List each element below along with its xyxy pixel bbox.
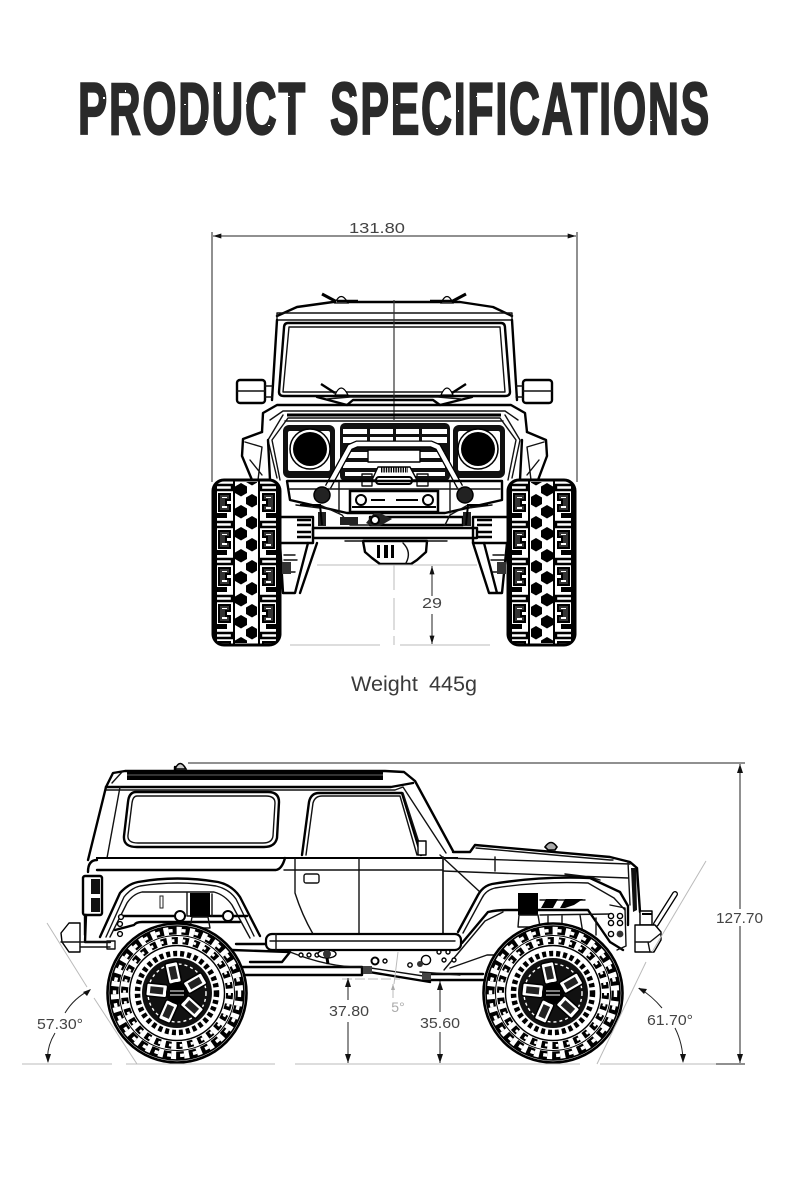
middle clearance dimension: 37.80 xyxy=(329,978,400,1063)
front approach angle: 61.70 degrees: 61.70° xyxy=(647,1012,693,1029)
front view: axle, differential and suspension xyxy=(280,505,508,593)
front view: grille xyxy=(340,423,450,481)
side view: hood and front fender xyxy=(418,841,640,950)
breakover angle: 5 degrees xyxy=(391,952,405,1015)
front view: left tire xyxy=(213,480,280,645)
side view: front wheel xyxy=(484,924,622,1062)
front view: side mirrors xyxy=(237,380,552,403)
rear departure angle: 57.30 degrees xyxy=(37,923,137,1064)
breakover angle: 5 degrees: 5° xyxy=(391,999,405,1015)
side view of the vehicle xyxy=(61,764,675,1062)
side view: rear fender and shock xyxy=(100,878,260,938)
front view: bumper with fog lights and plate xyxy=(287,481,502,513)
weight label: Weight 445g xyxy=(351,673,477,696)
rear departure angle: 57.30 degrees: 57.30° xyxy=(37,1016,83,1033)
front view: bull bar and winch xyxy=(328,444,460,487)
side view: tail light and rear bumper xyxy=(61,876,115,952)
front view: headlights xyxy=(283,425,505,478)
front view: right tire xyxy=(508,480,575,645)
front approach angle: 61.70 degrees xyxy=(597,861,706,1064)
middle clearance dimension: 37.80: 37.80 xyxy=(329,1003,369,1020)
front clearance dimension: 35.60: 35.60 xyxy=(420,1015,460,1032)
side view: cab, roof and windows xyxy=(88,764,458,934)
front view: hood and fenders xyxy=(242,397,547,480)
side view height dimension: 127.70 xyxy=(188,763,763,1064)
front view ground clearance dimension: 29 xyxy=(290,565,490,645)
title: PRODUCT xyxy=(78,69,307,150)
side view height dimension: 127.70: 127.70 xyxy=(716,910,763,927)
front clearance dimension: 35.60 xyxy=(420,981,460,1063)
side view ground line xyxy=(22,1063,716,1065)
title xyxy=(78,69,711,150)
side view: side step and chassis xyxy=(232,912,503,982)
front view width dimension: 131.80: 131.80 xyxy=(349,220,405,237)
front view width dimension: 131.80 xyxy=(212,220,577,482)
side view: rear wheel xyxy=(108,924,246,1062)
front view: cab and windshield xyxy=(272,294,517,420)
front view of the vehicle xyxy=(213,294,575,645)
front view ground clearance dimension: 29: 29 xyxy=(422,595,442,612)
side view: front bumper and stinger xyxy=(635,894,675,952)
